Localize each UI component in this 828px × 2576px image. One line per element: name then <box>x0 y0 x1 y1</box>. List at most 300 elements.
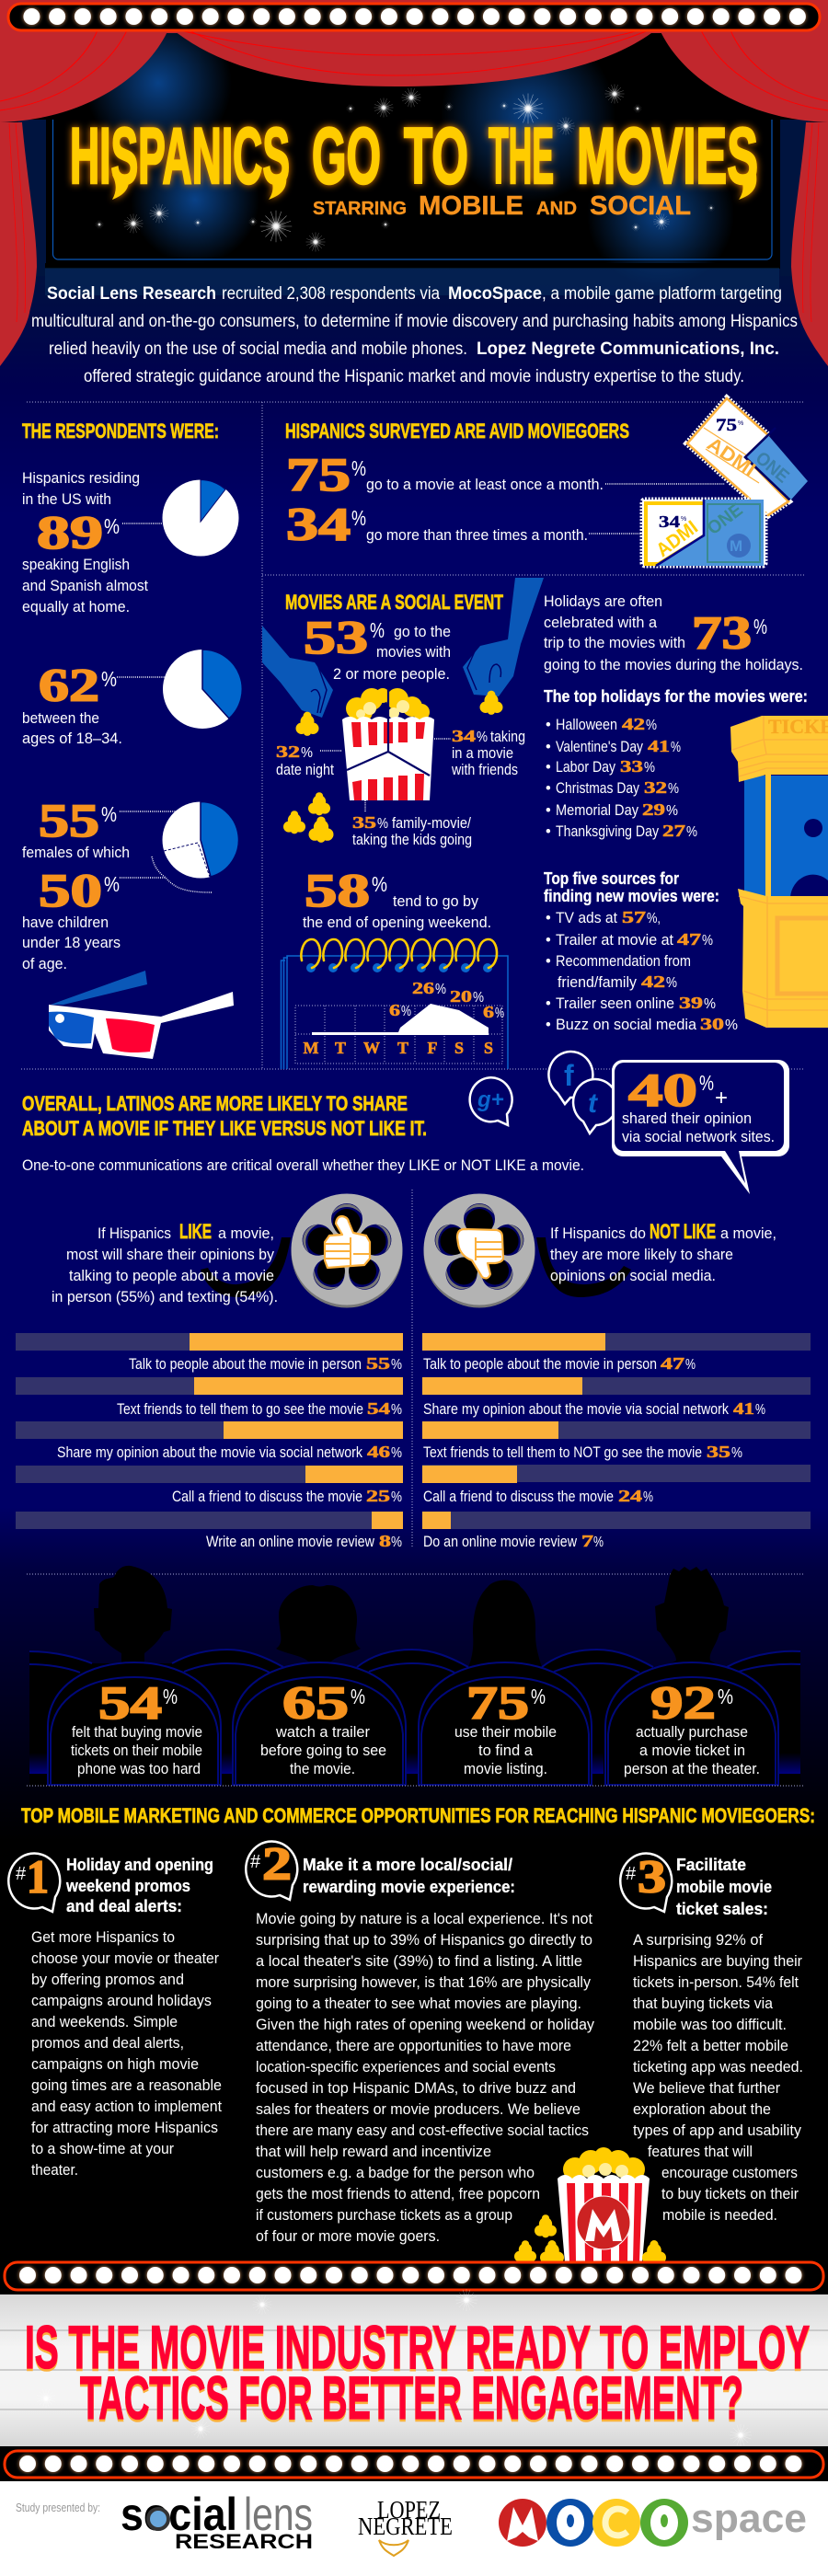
chart: opening weekend calendar: T <box>397 1039 408 1057</box>
text block: opportunity 3: mobile was too difficult. <box>633 2017 787 2033</box>
closing panel: call to action <box>0 2289 828 2446</box>
heading: local social rewarding: rewarding movie experience: <box>303 1878 515 1896</box>
bar chart: do not like <box>422 1333 811 1550</box>
text: if hispanics do not like: NOT LIKE <box>650 1220 716 1243</box>
seat: 65 percent <box>233 1662 406 1785</box>
text: if hispanics do not like: a movie, <box>720 1225 776 1242</box>
stat: 89 percent <box>22 470 164 615</box>
list: top holidays: Memorial Day <box>556 802 639 819</box>
bar chart: do not like: 41 <box>733 1399 754 1418</box>
icon: popcorn bucket <box>342 688 434 800</box>
bar chart: do not like: 24 <box>618 1487 642 1505</box>
bar chart: do not like: Text friends to tell them to NOT go see the movie <box>423 1444 702 1461</box>
callout: 40 percent: shared their opinion <box>622 1110 752 1127</box>
seat: 54 percent <box>48 1662 221 1785</box>
callout: 35 percent family: taking the kids going <box>352 832 472 848</box>
icon: number 2 bubble: 2 <box>262 1839 292 1891</box>
chart: opening weekend calendar: 6 <box>389 1001 400 1019</box>
list: top five sources: Buzz on social media <box>556 1017 697 1033</box>
stat: 62 percent: % <box>101 667 117 691</box>
list: top holidays: Valentine's Day <box>556 739 644 755</box>
seat: 54 percent: phone was too hard <box>77 1761 201 1777</box>
curtain: top valance <box>0 0 828 86</box>
icon: twitter bubble <box>573 1079 617 1133</box>
heading: social event: MOVIES ARE A SOCIAL EVENT <box>285 591 503 614</box>
bar chart: like: % <box>391 1402 402 1418</box>
seat: 92 percent: % <box>718 1685 733 1708</box>
stat: 75 percent: 75 <box>286 450 351 501</box>
stat: 55 and 50 percent: % <box>101 802 117 826</box>
stat: 89 percent: in the US with <box>22 491 111 508</box>
bar chart: like: % <box>391 1445 402 1461</box>
bar chart: do not like: % <box>685 1357 696 1373</box>
stat: 55 and 50 percent: under 18 years <box>22 935 121 951</box>
icon: number 1 bubble: # <box>16 1864 27 1884</box>
text block: opportunity 1: campaigns on high movie <box>31 2056 199 2073</box>
heading: avid moviegoers: HISPANICS SURVEYED ARE AVID MOVIEGOERS <box>285 420 629 443</box>
text block: opportunity 3 <box>633 1932 803 2224</box>
chart: opening weekend calendar: 6 <box>483 1003 494 1021</box>
icon: ticket 34 percent: M <box>730 537 742 555</box>
seat: 92 percent: person at the theater. <box>624 1761 760 1777</box>
heading: holiday and opening: and deal alerts: <box>66 1897 182 1915</box>
stat: 34 percent: % <box>351 506 366 530</box>
seats: back row <box>29 1650 800 1786</box>
icon: number 1 bubble <box>8 1852 60 1912</box>
stat: 89 percent: 89 <box>37 508 103 559</box>
stat: 62 percent: ages of 18–34. <box>22 730 122 747</box>
text block: opportunity 1: theater. <box>31 2162 78 2179</box>
chart: opening weekend calendar: S <box>454 1039 464 1057</box>
stat: 62 percent: 62 <box>39 661 99 712</box>
seat: 75 percent: movie listing. <box>464 1761 547 1777</box>
logo: lopez negrete: LOPEZ <box>377 2496 441 2524</box>
marquee lights: lower top <box>5 2262 823 2290</box>
list: top holidays: Labor Day <box>556 759 616 776</box>
text block: opportunity 3: that buying tickets via <box>633 1995 774 2012</box>
stat: 55 and 50 percent: % <box>104 872 120 896</box>
heading: facilitate mobile ticket sales <box>676 1856 772 1918</box>
callout: 34 percent with friends: 34 <box>452 727 476 745</box>
chart: opening weekend calendar <box>282 939 508 1069</box>
text: if hispanics do not like: they are more likely to share <box>550 1247 733 1263</box>
list: top five sources: %, <box>647 911 661 926</box>
list: top holidays: % <box>644 760 655 776</box>
list: top five sources: % <box>702 933 713 949</box>
heading: facilitate mobile ticket sales: mobile movie <box>676 1878 772 1896</box>
seat: 65 percent: the movie. <box>290 1761 355 1777</box>
stat: 53 percent: % <box>370 618 385 642</box>
seat: 65 percent: watch a trailer <box>275 1724 370 1741</box>
logo: mocospace: space <box>691 2496 807 2541</box>
bar chart: like: 46 <box>367 1443 390 1461</box>
pie chart: 55 percent <box>162 802 239 878</box>
text: if hispanics do not like: If Hispanics do <box>550 1225 646 1242</box>
heading: holiday and opening <box>65 1856 213 1915</box>
intro text: offered strategic guidance around the Hispanic market and movie industry expertise to the study. <box>84 367 744 386</box>
text block: opportunity 3: tickets in-person. 54% felt <box>633 1974 799 1991</box>
list: top five sources: 39 <box>679 994 703 1012</box>
stat: 53 percent: 53 <box>304 613 368 664</box>
list: top five sources: Trailer seen online <box>556 995 674 1012</box>
logo: social lens research: lens <box>244 2489 313 2540</box>
heading: facilitate mobile ticket sales: ticket sales: <box>676 1900 768 1918</box>
holidays text with 73 percent: celebrated with a <box>544 615 658 631</box>
seat: 65 percent: % <box>351 1685 365 1708</box>
text block: opportunity 2: more surprising however, is that 16% are physically <box>256 1974 592 1991</box>
curtain: left <box>0 28 169 366</box>
panel: opportunity 2 <box>246 1839 595 2245</box>
text block: opportunity 3: exploration about the <box>633 2101 771 2118</box>
list: top holidays: % <box>668 781 679 797</box>
bar chart: like <box>16 1333 403 1550</box>
text block: opportunity 1 <box>31 1929 222 2179</box>
text block: opportunity 1: choose your movie or theater <box>31 1950 219 1967</box>
icon: number 3 bubble: # <box>626 1864 637 1884</box>
intro text: , a mobile game platform targeting <box>542 284 782 304</box>
bar chart: like: Talk to people about the movie in person <box>129 1356 362 1373</box>
callout: 32 percent date night: 32 <box>276 742 300 761</box>
list: top five sources: Top five sources for <box>544 869 679 888</box>
stat: 34 percent: 34 <box>286 500 351 551</box>
callout: 35 percent family <box>352 800 472 848</box>
chart: opening weekend calendar: % <box>401 1004 411 1019</box>
icon: ticket 75 percent <box>687 398 808 515</box>
text: if hispanics do not like <box>550 1220 776 1284</box>
subtitle: MOBILE <box>419 191 523 221</box>
stat: 62 percent <box>22 661 166 747</box>
silhouettes: audience heads <box>94 1566 729 1670</box>
list: top holidays: % <box>666 803 678 819</box>
stat: 58 percent: the end of opening weekend. <box>303 914 491 931</box>
icon: popcorn pieces <box>283 792 333 843</box>
list: top holidays: % <box>686 824 697 840</box>
chart: opening weekend calendar: W <box>363 1039 380 1057</box>
title <box>70 112 758 201</box>
text block: opportunity 2: of four or more movie goers. <box>256 2228 440 2245</box>
text: if hispanics like: talking to people about a movie <box>69 1268 274 1284</box>
callout: 32 percent date night <box>276 742 342 778</box>
list: top five sources: 30 <box>700 1015 724 1033</box>
icon: google plus bubble <box>470 1077 512 1125</box>
icon: left hand with popcorn <box>262 626 333 736</box>
chart: opening weekend calendar: 20 <box>450 987 472 1006</box>
holidays text with 73 percent: Holidays are often <box>544 593 662 610</box>
bar chart: do not like: Call a friend to discuss the movie <box>423 1489 614 1505</box>
icon: ticket 75 percent: ADMI <box>703 433 759 481</box>
text block: opportunity 3: encourage customers <box>661 2165 798 2181</box>
seat: 75 percent: % <box>531 1685 546 1708</box>
seat: 65 percent: 65 <box>282 1678 349 1730</box>
list: top holidays: • <box>546 739 551 755</box>
intro text: relied heavily on the use of social media and mobile phones. <box>49 339 467 359</box>
holidays text with 73 percent: % <box>753 615 767 638</box>
text block: opportunity 2: gets the most friends to attend, free popcorn <box>256 2186 540 2202</box>
stat: 58 percent: 58 <box>305 866 370 917</box>
chart: opening weekend calendar: % <box>473 990 484 1006</box>
stat: 75 percent <box>286 450 725 501</box>
text block: opportunity 1: by offering promos and <box>31 1972 184 1988</box>
seat: 75 percent: use their mobile <box>454 1724 557 1741</box>
list: top holidays: • <box>546 802 551 819</box>
seat: 75 percent: 75 <box>466 1678 529 1730</box>
bar chart: like: 25 <box>366 1487 390 1505</box>
callout: 35 percent family: 35 <box>352 813 376 832</box>
logo: mocospace <box>499 2496 807 2547</box>
icon: ticket 34 percent: % <box>681 516 686 523</box>
subtitle: STARRING <box>313 199 407 219</box>
stat: 55 and 50 percent: 55 <box>39 796 99 847</box>
text: if hispanics like: If Hispanics <box>98 1225 171 1242</box>
bar chart: like: Share my opinion about the movie via social network <box>57 1444 363 1461</box>
list: top holidays: • <box>546 759 551 776</box>
list: top holidays: Christmas Day <box>556 780 640 797</box>
list: top holidays: • <box>546 780 551 797</box>
panel: if hispanics like a movie <box>16 1194 403 1550</box>
subtitle: SOCIAL <box>590 191 691 221</box>
callout: 40 percent: % <box>699 1071 714 1095</box>
stars <box>96 85 715 252</box>
icon: number 2 bubble: # <box>250 1852 261 1872</box>
list: top holidays: 29 <box>642 800 665 819</box>
stat: 53 percent: movies with <box>376 644 451 661</box>
panel: opportunity 1 <box>8 1852 222 2179</box>
stat: 75 percent: % <box>351 456 366 480</box>
logo: lopez negrete: NEGRETE <box>358 2513 453 2540</box>
callout: 40 percent: 40 <box>628 1065 697 1117</box>
text block: opportunity 2: if customers purchase tickets as a group <box>256 2207 512 2224</box>
list: top holidays: 33 <box>620 757 643 776</box>
text block: opportunity 3: to buy tickets on their <box>661 2186 799 2202</box>
bar chart: like: % <box>391 1489 402 1505</box>
bar chart: do not like: 7 <box>581 1532 593 1550</box>
list: top five sources: % <box>704 996 716 1012</box>
stat: 53 percent <box>304 613 451 683</box>
pie chart: 62 percent <box>163 650 242 729</box>
list: top five sources: • <box>546 995 551 1012</box>
stat: 53 percent: go to the <box>394 624 451 640</box>
callout: 40 percent <box>612 1060 789 1194</box>
text block: opportunity 3: features that will <box>648 2144 753 2160</box>
stat: 62 percent: between the <box>22 710 99 727</box>
stat: 55 and 50 percent: have children <box>22 914 109 931</box>
text block: opportunity 2: focused in top Hispanic DMAs, to drive buzz and <box>256 2080 576 2097</box>
panel: movies are a social event <box>262 578 828 1069</box>
subtitle: AND <box>536 199 577 219</box>
callout: 32 percent date night: % <box>301 745 313 761</box>
icon: ticket 34 percent: ADMI <box>652 517 702 561</box>
text block: opportunity 3: A surprising 92% of <box>633 1932 763 1949</box>
seat: 92 percent <box>605 1662 778 1785</box>
chart: opening weekend calendar: 26 <box>412 979 434 997</box>
text block: opportunity 3: ticketing app was needed. <box>633 2059 803 2076</box>
text: if hispanics do not like: opinions on social media. <box>550 1268 716 1284</box>
seat: 65 percent: before going to see <box>260 1742 386 1759</box>
logo: social lens research: RESEARCH <box>175 2530 313 2553</box>
chart: opening weekend calendar: M <box>304 1039 318 1057</box>
bar chart: like: 55 <box>366 1354 390 1373</box>
bar chart: do not like: % <box>643 1489 653 1505</box>
seat: 92 percent: a movie ticket in <box>639 1742 745 1759</box>
marquee lights: top <box>8 4 820 30</box>
text block: opportunity 2 <box>256 1911 595 2245</box>
callout: 34 percent with friends <box>434 727 525 778</box>
stat: 89 percent: speaking English <box>22 557 130 573</box>
text block: opportunity 1: promos and deal alerts, <box>31 2035 184 2052</box>
bar chart: do not like: % <box>731 1445 742 1461</box>
panel: opportunity 3 <box>620 1852 803 2224</box>
bar chart: do not like: Do an online movie review <box>423 1534 577 1550</box>
text block: opportunity 3: We believe that further <box>633 2080 780 2097</box>
list: top five sources: finding new movies were: <box>544 887 719 905</box>
stage: curtains, screen and marquee <box>0 0 828 366</box>
callout: 34 percent with friends: taking <box>490 729 525 745</box>
text: if hispanics like: LIKE <box>179 1220 212 1243</box>
list: top five sources: 42 <box>641 972 665 991</box>
bar chart: do not like: 35 <box>707 1443 730 1461</box>
callout: 40 percent: via social network sites. <box>622 1129 775 1145</box>
text block: opportunity 1: and easy action to implement <box>31 2099 222 2115</box>
callout: 34 percent with friends: in a movie <box>452 745 513 762</box>
text block: opportunity 1: to a show-time at your <box>31 2141 174 2157</box>
list: top holidays: • <box>546 717 551 733</box>
text block: opportunity 2: surprising that up to 39% of Hispanics go directly to <box>256 1932 592 1949</box>
bar chart: do not like: Share my opinion about the movie via social network <box>423 1401 730 1418</box>
text block: opportunity 2: that will help reward and incentivize <box>256 2144 491 2160</box>
holidays text with 73 percent: 73 <box>692 608 752 660</box>
text block: opportunity 3: Hispanics are buying their <box>633 1953 802 1970</box>
bar chart: do not like: % <box>593 1535 604 1550</box>
list: top five sources: Recommendation from <box>556 953 691 970</box>
icon: right hand with popcorn <box>463 578 544 715</box>
list: top holidays: Thanksgiving Day <box>556 823 660 840</box>
seat: 54 percent: 54 <box>98 1678 162 1730</box>
bar chart: like: % <box>391 1535 402 1550</box>
heading: local social rewarding: Make it a more local/social/ <box>303 1856 512 1874</box>
bar chart: like: Write an online movie review <box>206 1534 374 1550</box>
list: top holidays: 42 <box>622 715 645 733</box>
icon: google plus bubble: g+ <box>477 1087 504 1112</box>
stat: 34 percent: go more than three times a month. <box>366 527 588 544</box>
screen <box>18 9 810 295</box>
list: top holidays: Halloween <box>556 717 617 733</box>
logo: social lens research <box>121 2489 313 2553</box>
heading: latinos share: ABOUT A MOVIE IF THEY LIKE VERSUS NOT LIKE IT. <box>22 1117 427 1140</box>
heading: local social rewarding <box>303 1856 515 1896</box>
intro text <box>31 284 798 386</box>
footer: sponsors <box>0 2481 828 2576</box>
panel: avid moviegoers <box>285 398 808 566</box>
icon: number 1 bubble: 1 <box>27 1852 49 1903</box>
panel: if hispanics do not like a movie <box>422 1194 811 1550</box>
icon: ticket 34 percent: 34 <box>659 512 680 531</box>
chart: opening weekend calendar: % <box>435 982 446 997</box>
text block: opportunity 3: mobile is needed. <box>662 2207 777 2224</box>
list: top five sources: % <box>666 975 677 991</box>
marquee lights: bottom <box>0 2446 828 2481</box>
logo: social lens research: social <box>121 2489 237 2540</box>
bar chart: do not like: % <box>755 1402 765 1418</box>
text block: opportunity 1: campaigns around holidays <box>31 1993 212 2009</box>
seat: 54 percent: felt that buying movie <box>72 1724 202 1741</box>
text block: opportunity 1: Get more Hispanics to <box>31 1929 175 1946</box>
chart: opening weekend calendar: % <box>495 1006 504 1021</box>
icon: number 3 bubble <box>620 1852 672 1912</box>
intro text: recruited 2,308 respondents via <box>222 284 440 304</box>
text block: opportunity 2: attendance, there are opportunities to have more <box>256 2038 571 2054</box>
text block: opportunity 2: Movie going by nature is a local experience. It's not <box>256 1911 592 1927</box>
icon: ticket 34 percent <box>642 500 765 566</box>
list: top holidays: 32 <box>644 778 667 797</box>
stat: 89 percent: and Spanish almost <box>22 578 148 594</box>
text block: opportunity 2: Given the high rates of opening weekend or holiday <box>256 2017 595 2033</box>
callout: 32 percent date night: date night <box>276 762 334 778</box>
seat: 54 percent: tickets on their mobile <box>71 1742 202 1759</box>
title: HISPANICS <box>70 112 290 201</box>
list: top holidays: % <box>671 740 681 755</box>
list: top holidays: 27 <box>662 822 685 840</box>
icon: popcorn bucket with M logo <box>514 2147 666 2265</box>
stat: 34 percent <box>286 500 641 551</box>
list: top five sources: • <box>546 932 551 949</box>
intro text: Social Lens Research <box>47 284 216 304</box>
text block: opportunity 3: 22% felt a better mobile <box>633 2038 788 2054</box>
text: one-to-one: One-to-one communications are critical overall whether they LIKE or NOT LIKE a movie. <box>22 1157 584 1174</box>
heading: latinos share: OVERALL, LATINOS ARE MORE LIKELY TO SHARE <box>22 1092 408 1115</box>
list: top five sources <box>544 869 738 1033</box>
text: if hispanics like: in person (55%) and texting (54%). <box>52 1289 278 1305</box>
text: if hispanics like: a movie, <box>218 1225 274 1242</box>
panel: the respondents <box>22 420 242 1059</box>
seat: 75 percent: to find a <box>478 1742 534 1759</box>
heading: is the movie industry ready <box>25 2313 810 2432</box>
holidays text with 73 percent: going to the movies during the holidays. <box>544 657 803 673</box>
icon: 3D glasses <box>49 971 234 1059</box>
list: top holidays: 41 <box>648 737 670 755</box>
panel: theater seats with stats <box>29 1566 800 1786</box>
icon: ticket 75 percent: 75 <box>716 416 737 435</box>
list: top five sources: 47 <box>677 930 701 949</box>
list: top five sources: 57 <box>622 908 646 926</box>
icon: facebook bubble: f <box>564 1059 574 1092</box>
stat: 58 percent: tend to go by <box>393 893 479 910</box>
stat: 58 percent <box>303 866 491 931</box>
text block: opportunity 2: location-specific experiences and social events <box>256 2059 556 2076</box>
title: TO <box>404 112 468 201</box>
bar chart: like: Call a friend to discuss the movie <box>172 1489 362 1505</box>
text: study presented by: Study presented by: <box>16 2501 100 2514</box>
callout: 34 percent with friends: % <box>477 730 488 745</box>
stat: 53 percent: 2 or more people. <box>333 666 450 683</box>
icon: number 2 bubble <box>246 1839 297 1900</box>
stat: 89 percent: equally at home. <box>22 599 130 615</box>
text block: opportunity 3: types of app and usability <box>633 2122 802 2139</box>
bar chart: do not like: Talk to people about the movie in person <box>423 1356 657 1373</box>
stat: 55 and 50 percent: of age. <box>22 956 67 972</box>
list: top five sources: • <box>546 910 551 926</box>
heading: latinos share <box>22 1092 427 1140</box>
text block: opportunity 1: and weekends. Simple <box>31 2014 178 2030</box>
bar chart: do not like: 47 <box>661 1354 684 1373</box>
heading: holiday and opening: weekend promos <box>65 1877 190 1895</box>
pie chart: 89 percent <box>162 480 239 556</box>
icon: ticket 75 percent: ONE <box>752 448 793 488</box>
chart: opening weekend calendar: T <box>335 1039 346 1057</box>
seat: 92 percent: 92 <box>650 1678 716 1730</box>
seat: 92 percent: actually purchase <box>636 1724 748 1741</box>
icon: twitter bubble: t <box>588 1088 599 1119</box>
curtain: right <box>659 28 828 366</box>
